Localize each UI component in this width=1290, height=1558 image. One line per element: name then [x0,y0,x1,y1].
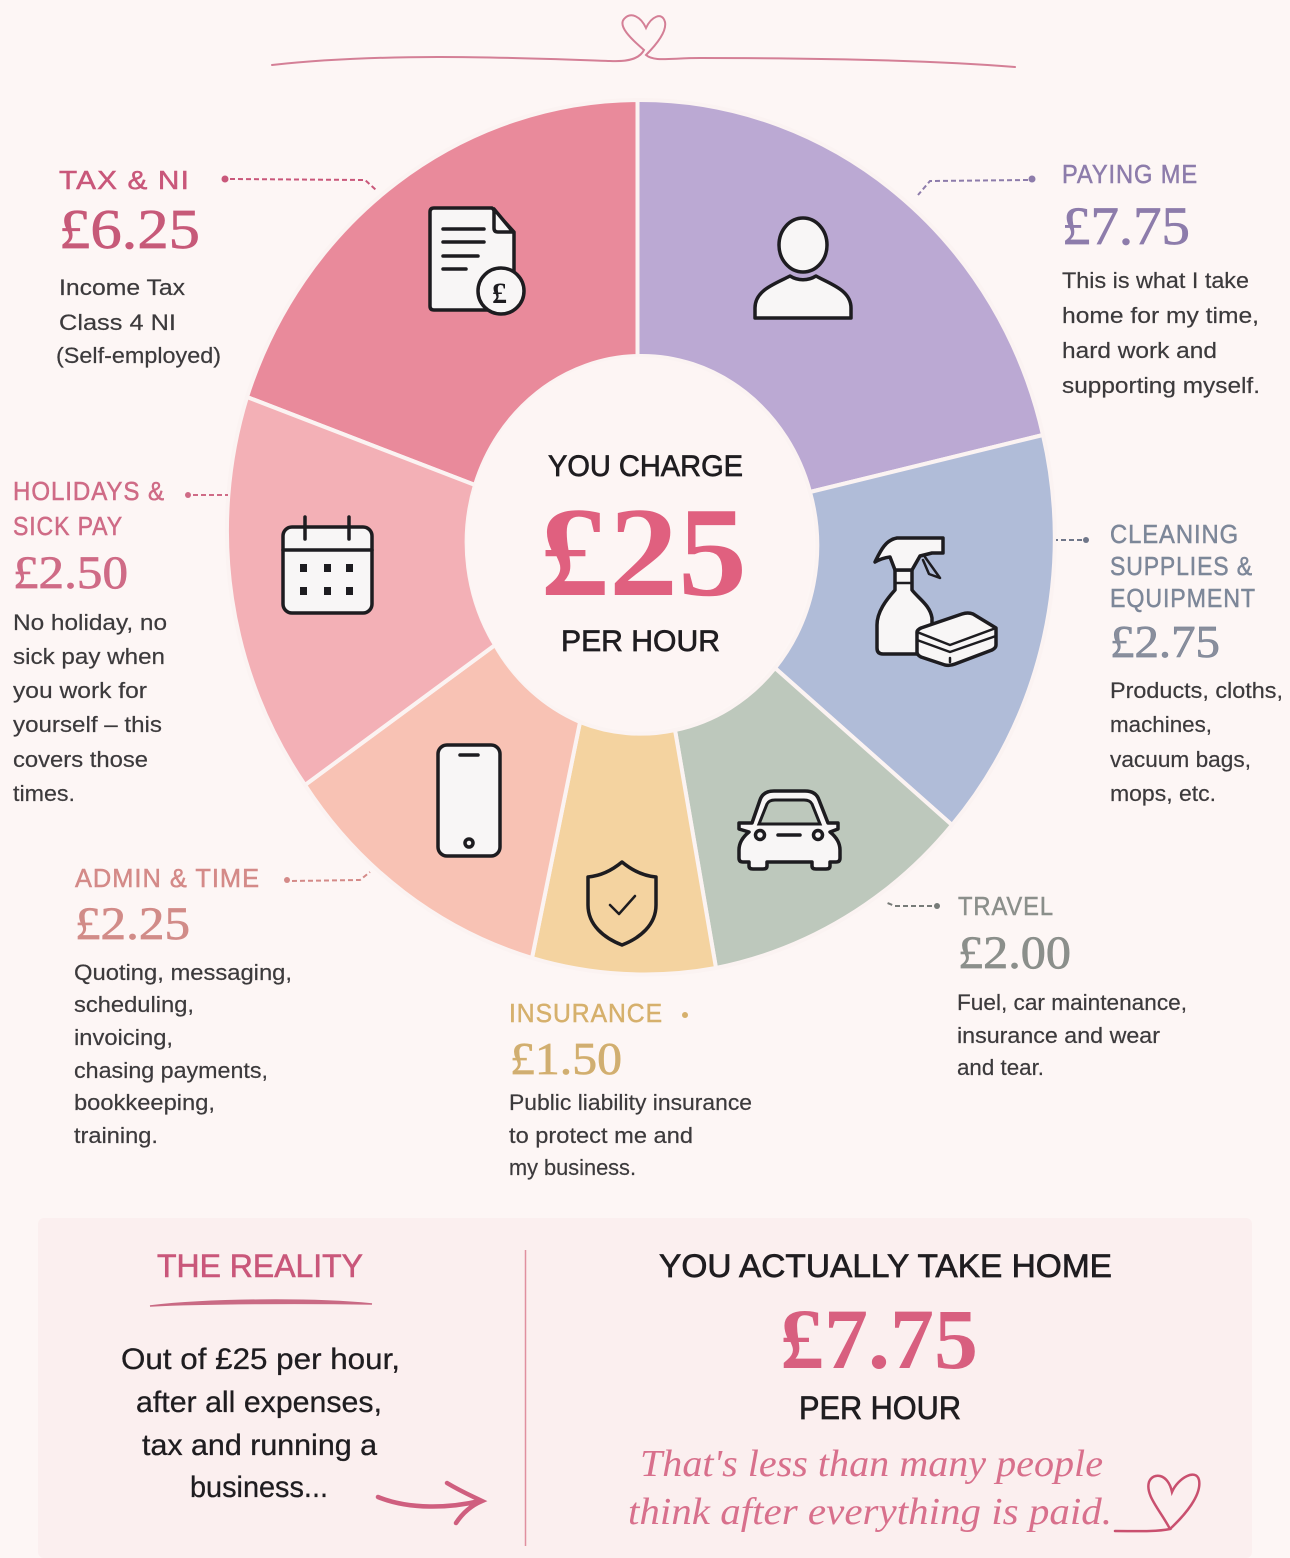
segment: cleaning supplies [775,435,1055,825]
callout: holidays and sick pay: £2.50 [13,547,128,599]
callout: insurance [509,998,752,1180]
take home price: £7.75 [780,1291,978,1387]
segment: tax and NI [247,100,638,485]
callout: travel: Fuel, car maintenance, [957,990,1187,1015]
centre heading: YOU CHARGE [548,450,743,483]
callout: holidays and sick pay: times. [13,781,75,806]
centre circle [466,357,814,731]
segment: paying me [638,100,1043,492]
reality text block: tax and running a [142,1429,377,1462]
callout: tax and NI [56,165,376,368]
callout: paying me: hard work and [1062,338,1217,363]
callout: paying me: £7.75 [1062,196,1190,256]
callout: holidays and sick pay: you work for [13,678,147,703]
callout: paying me: This is what I take [1062,268,1249,293]
callout: cleaning supplies and equipment: Products, cloths, [1110,678,1283,703]
icon: calendar [283,517,372,613]
callout: cleaning supplies and equipment [1056,519,1283,806]
reality text block [121,1343,400,1504]
callout: admin and time: Quoting, messaging, [74,960,292,985]
panel: bottom summary [38,1218,1252,1558]
callout: holidays and sick pay: covers those [13,747,148,772]
icon: heart [1115,1475,1199,1531]
icon: tax document [430,208,524,314]
callout: travel: insurance and wear [957,1023,1160,1048]
callout: holidays and sick pay: HOLIDAYS & [13,476,165,506]
icon: car [739,791,840,869]
callout: holidays and sick pay: yourself – this [13,712,162,737]
handwritten note: That's less than many people [640,1443,1103,1485]
callout: insurance: Public liability insurance [509,1090,752,1115]
callout: paying me: supporting myself. [1062,373,1260,398]
callout: admin and time: chasing payments, [74,1058,268,1083]
take home per hour: PER HOUR [799,1390,961,1426]
callout: cleaning supplies and equipment: mops, etc. [1110,781,1216,806]
callout: holidays and sick pay: sick pay when [13,644,165,669]
callout: cleaning supplies and equipment: machines, [1110,712,1212,737]
callout: paying me: home for my time, [1062,303,1259,328]
donut chart [227,100,1055,974]
callout: cleaning supplies and equipment: £2.75 [1110,616,1220,667]
segment: insurance [532,722,716,974]
icon: tax document: £ [492,277,507,310]
panel heading: the reality: THE REALITY [157,1248,363,1284]
callout: tax and NI: TAX & NI [59,165,190,195]
callout: insurance: £1.50 [510,1033,622,1084]
icon: shield [588,862,656,945]
callout: admin and time: scheduling, [74,992,194,1017]
take home heading: YOU ACTUALLY TAKE HOME [659,1248,1112,1284]
callout: insurance: my business. [509,1155,636,1180]
centre sub heading: PER HOUR [561,625,720,658]
icon: phone [438,745,500,856]
segment: travel [675,668,952,968]
callout: travel: TRAVEL [958,891,1054,921]
callout: travel [885,891,1187,1080]
callout: tax and NI: Class 4 NI [59,310,176,335]
handwritten note [628,1443,1112,1533]
reality text block: Out of £25 per hour, [121,1343,400,1376]
callout: tax and NI: £6.25 [59,199,200,261]
callout: admin and time: £2.25 [75,898,190,950]
reality text block: after all expenses, [136,1386,382,1419]
segment: holidays and sick pay [227,397,495,785]
callout: admin and time: ADMIN & TIME [75,863,260,893]
callout: cleaning supplies and equipment: vacuum bags, [1110,747,1251,772]
callout: tax and NI: (Self-employed) [56,343,221,368]
callout: admin and time: invoicing, [74,1025,173,1050]
callout: admin and time [74,863,370,1148]
callout: tax and NI: Income Tax [59,275,185,300]
callout: travel: £2.00 [958,927,1071,979]
callout: holidays and sick pay [13,476,228,806]
top heart flourish [272,15,1015,67]
callout: cleaning supplies and equipment: CLEANING [1110,519,1239,549]
callout: cleaning supplies and equipment: EQUIPMENT [1110,583,1256,613]
icon: spray bottle and sponge [875,538,996,665]
callout: paying me [918,159,1260,398]
callout: paying me: PAYING ME [1062,159,1198,189]
callout: travel: and tear. [957,1055,1044,1080]
callout: admin and time: training. [74,1123,158,1148]
callout: holidays and sick pay: SICK PAY [13,511,123,541]
callout: admin and time: bookkeeping, [74,1090,215,1115]
callout: holidays and sick pay: No holiday, no [13,610,167,635]
segment: admin and time [305,645,580,958]
callout: cleaning supplies and equipment: SUPPLIES & [1110,551,1253,581]
reality text block: business... [190,1471,328,1504]
handwritten note: think after everything is paid. [628,1491,1112,1533]
callout: insurance: INSURANCE [509,998,663,1028]
icon: person [755,218,851,318]
arrow [378,1483,482,1523]
callout: insurance: to protect me and [509,1123,693,1148]
centre price: £25 [540,481,747,623]
